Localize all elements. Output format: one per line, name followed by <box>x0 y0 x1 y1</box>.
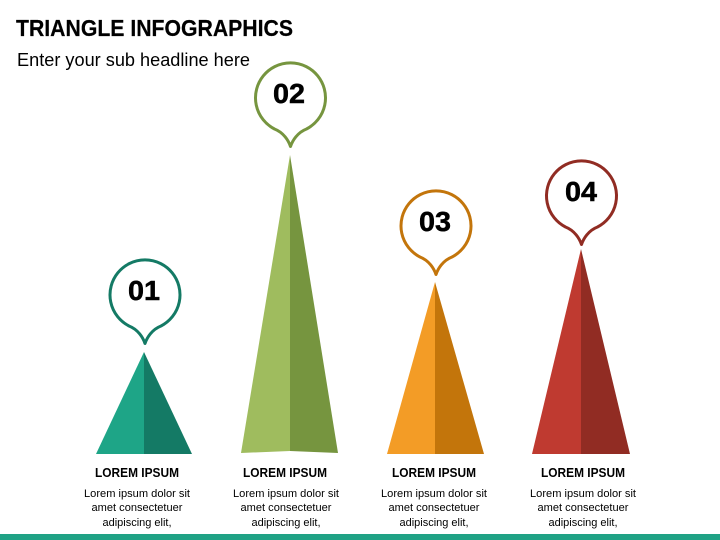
body 04: adipiscing elit, <box>548 517 618 529</box>
column 02 <box>233 63 339 529</box>
pin 03 <box>401 191 471 274</box>
footer bar <box>0 534 720 540</box>
body 03: Lorem ipsum dolor sit <box>381 488 487 500</box>
body 02 <box>233 488 339 529</box>
body 01: amet consectetuer <box>92 502 183 514</box>
pin 01 <box>110 260 180 344</box>
triangle 03 <box>387 282 484 454</box>
column 03 <box>381 191 487 529</box>
body 03: amet consectetuer <box>388 502 480 514</box>
triangle 02 <box>241 155 338 453</box>
subtitle: Enter your sub headline here <box>17 50 250 70</box>
body 02: adipiscing elit, <box>252 517 320 529</box>
body 04: Lorem ipsum dolor sit <box>530 488 636 500</box>
body 03: adipiscing elit, <box>400 517 468 529</box>
body 04: amet consectetuer <box>538 502 629 514</box>
label 02: LOREM IPSUM <box>243 466 327 480</box>
triangle 01 <box>96 352 192 454</box>
pin 02: 02 <box>273 78 305 109</box>
label 03: LOREM IPSUM <box>392 466 476 480</box>
body 02: amet consectetuer <box>240 502 332 514</box>
body 01: adipiscing elit, <box>102 517 172 529</box>
pin 04: 04 <box>565 176 597 207</box>
body 01: Lorem ipsum dolor sit <box>84 488 190 500</box>
pin 03: 03 <box>419 206 451 237</box>
pin 01: 01 <box>128 275 160 306</box>
label 04: LOREM IPSUM <box>541 466 625 480</box>
pin 04 <box>546 161 616 244</box>
column 04 <box>530 161 636 529</box>
body 02: Lorem ipsum dolor sit <box>233 488 339 500</box>
body 03 <box>381 488 487 529</box>
body 01 <box>84 488 190 529</box>
label 01: LOREM IPSUM <box>95 466 179 480</box>
triangle 04 <box>532 249 630 454</box>
body 04 <box>530 488 636 529</box>
pin 02 <box>256 63 326 146</box>
title: TRIANGLE INFOGRAPHICS <box>16 15 293 41</box>
column 01 <box>84 260 192 529</box>
